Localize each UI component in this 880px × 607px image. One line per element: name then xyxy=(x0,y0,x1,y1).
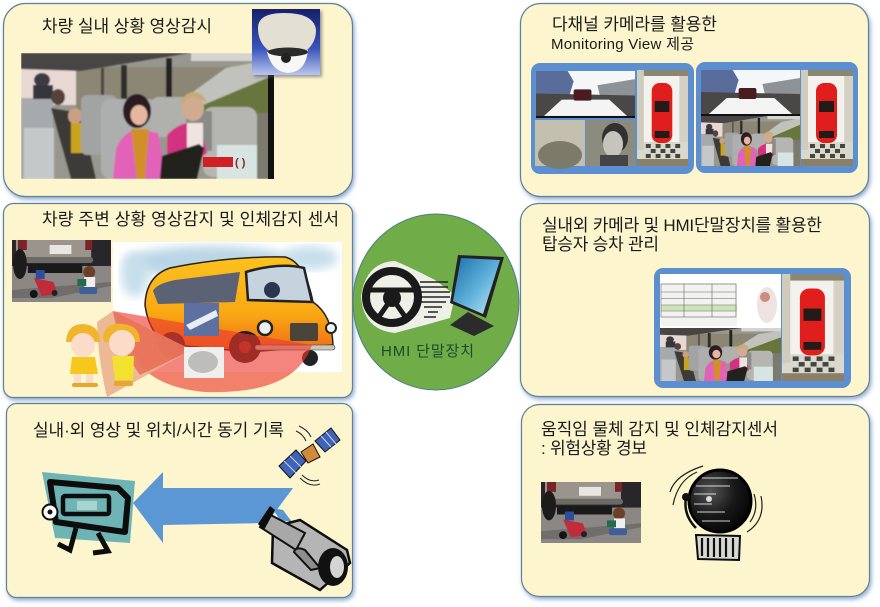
illustration: children in yellow xyxy=(66,324,140,387)
icon: steering wheel and dashboard xyxy=(361,261,455,333)
monitor view: passenger list xyxy=(654,268,851,388)
heading: in-vehicle monitoring: 차량 실내 상황 영상감시 xyxy=(42,17,212,36)
arrow: camera to recorder xyxy=(133,472,293,543)
panel: in-vehicle video monitoring xyxy=(4,4,352,196)
heading: surroundings detection: 차량 주변 상황 영상감지 및 인체감지 센서 xyxy=(42,210,339,229)
icon: dome camera xyxy=(252,9,320,75)
image: camera sensor xyxy=(184,303,219,336)
icon: monitor xyxy=(450,255,504,336)
central circle: HMI terminal xyxy=(353,214,519,390)
illustration: yellow school bus xyxy=(113,242,342,372)
photo: child behind car xyxy=(12,240,111,302)
heading: passenger management: 탑승자 승차 관리 xyxy=(542,235,659,254)
photo: child behind car xyxy=(541,482,641,543)
heading: danger warning: : 위험상황 경보 xyxy=(541,439,647,458)
icon: satellite xyxy=(279,426,340,485)
heading: multi-channel camera: 다채널 카메라를 활용한 xyxy=(552,15,717,34)
icon: video camera xyxy=(258,506,350,590)
image: body sensor xyxy=(184,347,224,378)
panel: motion detection and danger warning xyxy=(522,404,870,596)
heading: indoor and outdoor cameras: 실내외 카메라 및 HMI단말장치를 활용한 xyxy=(542,216,822,235)
monitor view: passenger camera xyxy=(696,62,858,173)
panel: passenger boarding management xyxy=(520,204,870,396)
heading: recording: 실내·외 영상 및 위치/시간 동기 기록 xyxy=(33,421,284,440)
panel: surroundings detection and body sensor xyxy=(4,204,352,398)
panel: multi-channel monitoring view xyxy=(520,4,868,196)
panel: synchronized recording xyxy=(6,404,352,598)
photo: children on bus xyxy=(21,52,274,179)
icon: walking cassette xyxy=(42,472,135,553)
photo: children on bus: ( ) xyxy=(235,157,246,169)
heading: motion detection: 움직임 물체 감지 및 인체감지센서 xyxy=(541,420,778,439)
label: HMI terminal: HMI 단말장치 xyxy=(381,343,474,360)
passenger table xyxy=(661,283,737,326)
icon: ringing bell xyxy=(670,466,762,560)
sensor detection fans xyxy=(97,311,312,397)
monitor view: driver camera xyxy=(531,63,694,174)
heading: monitoring view: Monitoring View 제공 xyxy=(551,36,694,53)
